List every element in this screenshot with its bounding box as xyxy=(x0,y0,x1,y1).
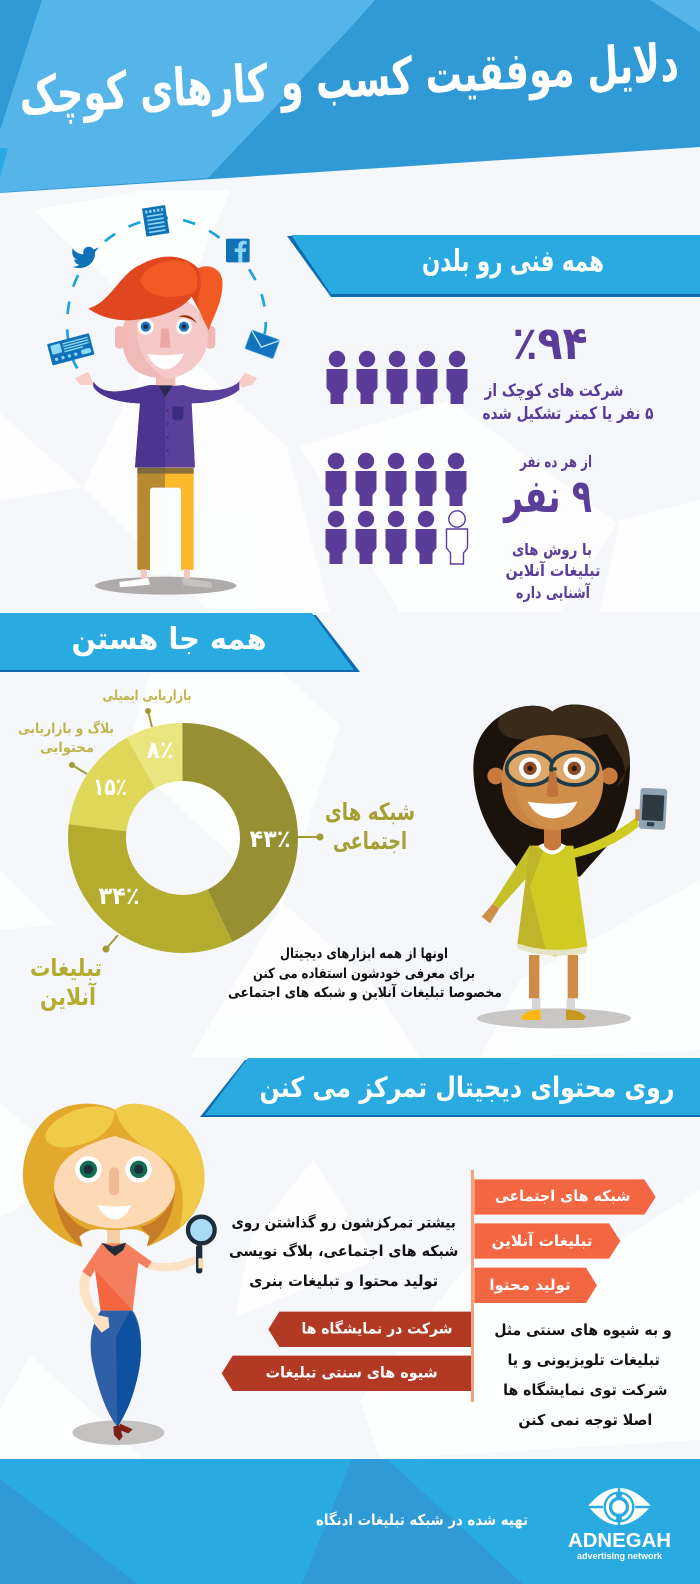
tag: online advertising xyxy=(474,1223,620,1259)
donut values: ۱۵٪ xyxy=(93,773,127,801)
text block: focus xyxy=(229,1213,458,1290)
head xyxy=(54,1136,175,1228)
shadow xyxy=(72,1420,164,1445)
shirt xyxy=(82,1243,152,1311)
logo tagline: advertising network xyxy=(577,1551,663,1562)
illustration: man juggling digital icons xyxy=(47,205,280,595)
neck xyxy=(107,1230,120,1245)
heading: section 2: همه جا هستن xyxy=(72,622,266,657)
head xyxy=(115,295,215,378)
text block: traditional xyxy=(494,1321,672,1429)
stat caption 2 xyxy=(503,452,600,602)
stat caption 2: از هر ده نفر xyxy=(519,452,592,471)
header banner xyxy=(0,0,700,193)
magnifier xyxy=(188,1217,215,1273)
illustration: woman with phone xyxy=(473,705,667,1028)
donut chart xyxy=(97,752,269,924)
pants xyxy=(91,1311,141,1427)
donut values: ۸٪ xyxy=(146,736,174,764)
icon: notepad xyxy=(142,205,169,237)
neck xyxy=(544,827,561,850)
section 1 banner xyxy=(287,235,700,297)
tag: traditional methods: شیوه های سنتی تبلیغات xyxy=(266,1363,438,1381)
icon: envelope xyxy=(245,330,280,359)
stat caption 2: ۹ نفر xyxy=(503,469,592,523)
tag: content production xyxy=(474,1268,597,1303)
illustration: blonde woman with magnifier xyxy=(23,1104,215,1445)
hair xyxy=(473,705,630,877)
tag: social networks: شبکه های اجتماعی xyxy=(495,1187,630,1205)
stat caption 1: ۵ نفر یا کمتر تشکیل شده xyxy=(482,404,654,424)
stat caption 1: شرکت های کوچک از xyxy=(484,381,624,401)
heading: section 1: همه فنی رو بلدن xyxy=(422,244,604,279)
shoes xyxy=(113,1423,133,1441)
donut labels: شبکه های xyxy=(325,798,415,826)
tag: exhibitions xyxy=(268,1312,471,1347)
tags and text group xyxy=(222,1179,672,1429)
arms xyxy=(79,1272,100,1320)
logo wordmark: ADNEGAH xyxy=(568,1530,671,1552)
text block: focus: شبکه های اجتماعی، بلاگ نویسی xyxy=(229,1242,458,1260)
text block: traditional: شرکت توی نمایشگاه ها xyxy=(503,1381,667,1399)
section 3 banner xyxy=(200,1058,700,1117)
donut labels: اجتماعی xyxy=(333,827,407,855)
tag: content production: تولید محتوا xyxy=(489,1276,571,1294)
tag: exhibitions: شرکت در نمایشگاه ها xyxy=(301,1319,452,1337)
donut values: ۳۴٪ xyxy=(98,882,140,910)
tag: traditional methods xyxy=(222,1356,471,1391)
timeline divider xyxy=(471,1170,474,1402)
text block: traditional: و به شیوه های سنتی مثل xyxy=(494,1321,672,1339)
text block: focus: بیشتر تمرکزشون رو گذاشتن روی xyxy=(231,1213,456,1231)
dashed juggling arc xyxy=(67,218,266,368)
tag: social networks xyxy=(474,1179,656,1215)
section 2 banner xyxy=(0,613,360,672)
hand on hip xyxy=(93,1314,109,1333)
text block: traditional: تبلیغات تلویزیونی و یا xyxy=(507,1351,660,1369)
text block: digital tools xyxy=(228,946,502,1001)
hands xyxy=(75,372,94,385)
text block: digital tools: اونها از همه ابزارهای دیجیتال xyxy=(280,946,448,962)
neck xyxy=(156,375,175,388)
donut values xyxy=(93,736,290,910)
text block: digital tools: مخصوصا تبلیغات آنلاین و شبکه های اجتماعی xyxy=(228,983,502,1001)
text block: focus: تولید محتوا و تبلیغات بنری xyxy=(249,1272,438,1290)
donut leader lines xyxy=(70,709,322,952)
donut labels: تبلیغات xyxy=(30,954,102,982)
head xyxy=(487,735,618,830)
donut labels: آنلاین xyxy=(40,982,97,1011)
stat caption 2: آشنایی داره xyxy=(516,582,590,602)
stat caption 1 xyxy=(482,381,654,424)
people row: five filled figures xyxy=(326,351,468,404)
icon: twitter xyxy=(72,247,99,268)
hair xyxy=(23,1104,204,1247)
hair xyxy=(88,257,222,330)
stat: 94 percent: ٪۹۴ xyxy=(512,316,588,370)
donut labels xyxy=(18,688,415,1011)
text block: traditional: اصلا توجه نمی کنن xyxy=(518,1411,652,1429)
logo: Adnegah eye xyxy=(587,1487,652,1526)
people grid: nine filled, one outlined xyxy=(326,453,468,564)
footer text: تهیه شده در شبکه تبلیغات ادنگاه xyxy=(316,1511,528,1529)
donut labels: محتوایی xyxy=(40,740,94,756)
shirt xyxy=(93,382,239,467)
phone xyxy=(639,788,667,830)
icon: facebook xyxy=(226,239,250,262)
shadow xyxy=(477,1008,631,1028)
stat caption 2: با روش های xyxy=(512,540,592,559)
arms xyxy=(493,845,537,908)
text block: digital tools: برای معرفی خودشون استفاده می کنن xyxy=(253,966,475,982)
icon: web card xyxy=(47,333,95,366)
dress xyxy=(517,843,587,957)
footer xyxy=(0,1459,700,1584)
donut labels: بلاگ و بازاریابی xyxy=(18,720,114,737)
tag: online advertising: تبلیغات آنلاین xyxy=(491,1232,592,1250)
shadow xyxy=(95,577,236,595)
legs xyxy=(521,955,586,1020)
stat caption 2: تبلیغات آنلاین xyxy=(506,560,600,580)
donut labels: بازاریابی ایمیلی xyxy=(102,688,192,704)
donut values: ۴۳٪ xyxy=(250,825,290,853)
legs xyxy=(119,468,212,588)
